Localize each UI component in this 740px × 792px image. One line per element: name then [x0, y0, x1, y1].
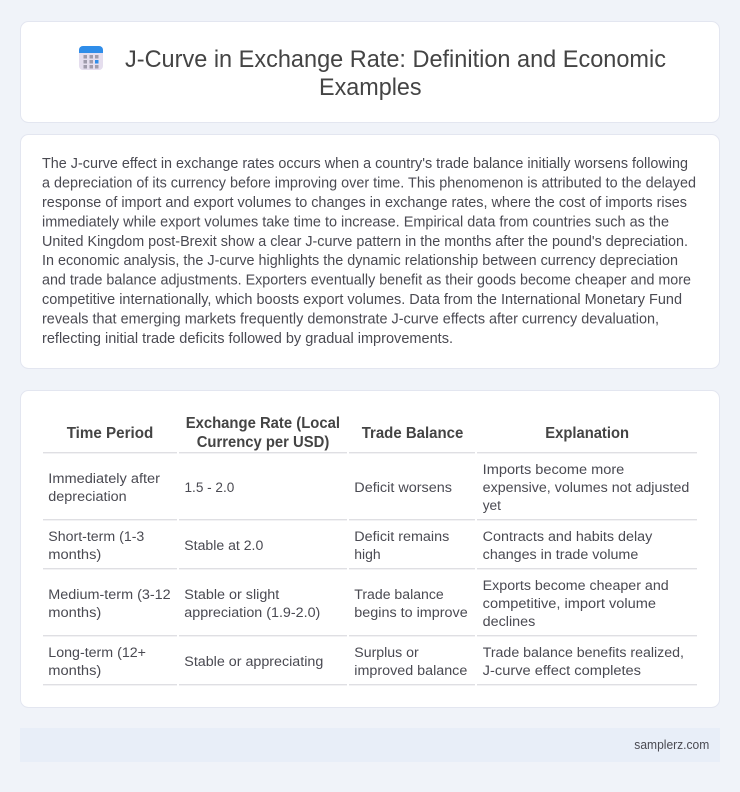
table header row: Explanation: [545, 425, 629, 442]
text block: J-curve description: competitive internationally, which boosts export volumes. Data from the International Monetary Fund: [42, 292, 682, 308]
table header row: Trade Balance: [362, 425, 464, 442]
table row: medium-term: competitive, import volume: [483, 596, 656, 612]
table row: medium-term: Stable or slight: [184, 587, 279, 603]
table row: medium-term: months): [48, 605, 101, 621]
table row: short-term: months): [48, 547, 101, 563]
table row: immediately after depreciation: Deficit worsens: [354, 480, 452, 496]
table header row: [67, 415, 629, 451]
panel: table card: [20, 390, 720, 708]
title: [125, 46, 666, 101]
table row: medium-term: appreciation (1.9-2.0): [184, 605, 320, 621]
table row: long-term: Long-term (12+: [48, 645, 146, 661]
title: J-Curve in Exchange Rate: Definition and Economic: [125, 46, 666, 73]
table row: long-term: Trade balance benefits realized,: [483, 645, 684, 661]
text block: J-curve description: reflecting initial trade deficits followed by gradual improvements.: [42, 331, 453, 347]
text block: J-curve description: and trade balance adjustments. Exporters eventually benefit as their goods become cheaper and more: [42, 273, 691, 289]
table row: immediately after depreciation: 1.5 - 2.0: [184, 480, 234, 496]
table row: immediately after depreciation: Imports become more: [483, 462, 624, 478]
table row: long-term: J-curve effect completes: [483, 663, 641, 679]
table header row: Time Period: [67, 425, 153, 442]
footer: samplerz.com: [634, 738, 709, 752]
table row: long-term: Stable or appreciating: [184, 654, 323, 670]
text block: J-curve description: United Kingdom post-Brexit show a clear J-curve pattern in the months after the pound's depreciation.: [42, 234, 688, 250]
text block: J-curve description: [42, 156, 696, 347]
table row: medium-term: declines: [483, 614, 535, 630]
table row: medium-term: Trade balance: [354, 587, 444, 603]
table header row: Currency per USD): [197, 434, 329, 451]
table row: immediately after depreciation: expensive, volumes not adjusted: [483, 480, 689, 496]
text block: J-curve description: reveals that emerging markets frequently demonstrate J-curve effects after currency devaluation,: [42, 312, 659, 328]
table row: short-term: Stable at 2.0: [184, 538, 263, 554]
table row: long-term: Surplus or: [354, 645, 419, 661]
text block: J-curve description: a depreciation of its currency before improving over time. This phenomenon is attributed to the delayed: [42, 175, 696, 191]
footer: [20, 728, 720, 762]
panel: title card: [20, 22, 720, 122]
table row: short-term: Deficit remains: [354, 529, 449, 545]
table row: long-term: improved balance: [354, 663, 467, 679]
table row: short-term: high: [354, 547, 381, 563]
table row: immediately after depreciation: Immediately after: [48, 471, 160, 487]
table row: long-term: months): [48, 663, 101, 679]
panel: description card: [20, 134, 720, 368]
table row: immediately after depreciation: [48, 462, 689, 514]
table row: medium-term: begins to improve: [354, 605, 468, 621]
table row: immediately after depreciation: yet: [483, 498, 501, 514]
text block: J-curve description: response of import and export volumes to changes in exchange rates, where the cost of imports rises: [42, 195, 687, 211]
table row: short-term: changes in trade volume: [483, 547, 638, 563]
title: Examples: [319, 74, 422, 101]
table row: immediately after depreciation: depreciation: [48, 489, 127, 505]
text block: J-curve description: In economic analysis, the J-curve highlights the dynamic relationship between currency depreciation: [42, 253, 678, 269]
table row: short-term: [48, 529, 653, 563]
table row: medium-term: [48, 578, 669, 630]
table row: short-term: Short-term (1-3: [48, 529, 144, 545]
table row: short-term: Contracts and habits delay: [483, 529, 653, 545]
text block: J-curve description: The J-curve effect in exchange rates occurs when a country's trade balance initially worsens following: [42, 156, 688, 172]
text block: J-curve description: immediately while export volumes take time to increase. Empirical data from countries such as the: [42, 214, 669, 230]
icon: calendar: [79, 46, 103, 70]
table row: medium-term: Medium-term (3-12: [48, 587, 171, 603]
table header row: Exchange Rate (Local: [186, 415, 340, 432]
table row: long-term: [48, 645, 684, 679]
table row: medium-term: Exports become cheaper and: [483, 578, 669, 594]
